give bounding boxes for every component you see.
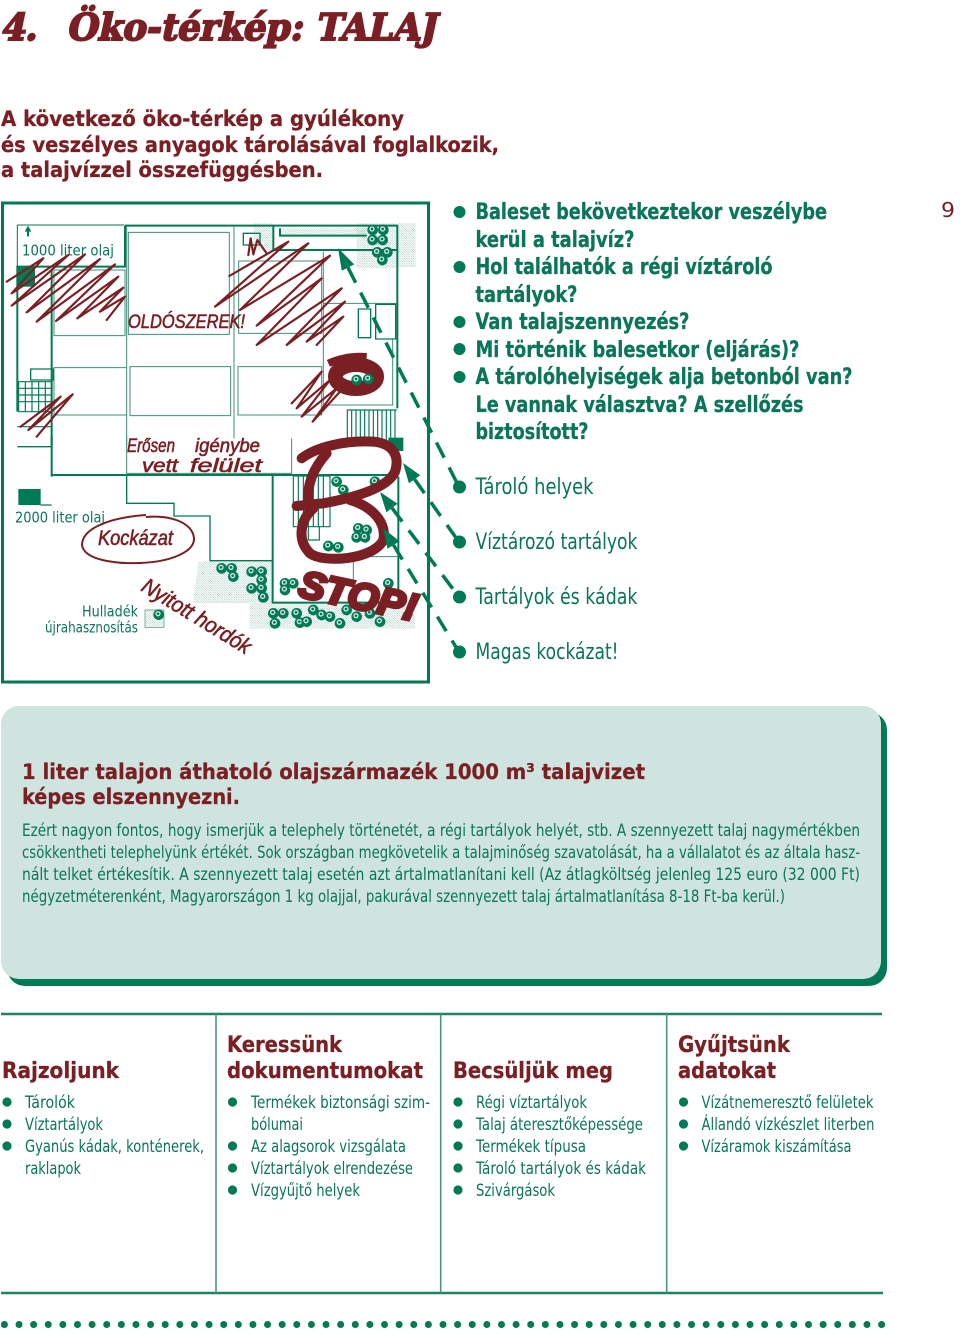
map legend <box>453 475 638 665</box>
handwritten notes: vett <box>142 456 179 477</box>
intro text: és veszélyes anyagok tárolásával foglalkozik, <box>1 133 499 158</box>
panel body <box>1 706 881 979</box>
heading: Keressünk <box>227 1033 343 1058</box>
heading: adatokat <box>678 1059 776 1084</box>
intro text: A következő öko-térkép a gyúlékony <box>1 107 404 132</box>
red figure 8 warning mark <box>297 441 397 559</box>
map legend: Magas kockázat! <box>476 640 618 665</box>
list: bólumai <box>251 1115 303 1135</box>
list <box>228 1093 430 1201</box>
question list: kerül a talajvíz? <box>476 228 634 253</box>
callout heading: 1 liter talajon áthatoló olajszármazék 1000 m³ talajvizet <box>22 760 645 785</box>
red hatching marks <box>7 238 377 437</box>
map labels <box>15 242 138 636</box>
question list: biztosított? <box>476 420 588 445</box>
page number: 9 <box>941 198 955 222</box>
list: Termékek típusa <box>475 1137 586 1157</box>
list: Vízáramok kiszámítása <box>702 1137 852 1157</box>
callout heading <box>22 760 645 810</box>
map frame <box>2 203 428 682</box>
list: Állandó vízkészlet literben <box>702 1113 874 1135</box>
question list: Hol találhatók a régi víztároló <box>476 255 772 280</box>
question list: tartályok? <box>476 283 578 308</box>
list: Gyanús kádak, konténerek, <box>25 1137 204 1157</box>
intro text: a talajvízzel összefüggésben. <box>1 158 323 183</box>
heading: dokumentumokat <box>227 1059 423 1084</box>
handwritten notes: Erősen <box>127 436 175 457</box>
arrow: high risk <box>383 528 459 652</box>
heading <box>678 1033 791 1084</box>
handwritten notes: OLDÓSZEREK! <box>128 311 246 333</box>
heading: Rajzoljunk <box>2 1059 120 1084</box>
map labels: újrahasznosítás <box>45 618 138 636</box>
map labels: 1000 liter olaj <box>22 242 114 260</box>
arrow: tanks and vats <box>380 492 459 597</box>
panel: site map <box>2 203 459 682</box>
map legend: Tároló helyek <box>475 475 594 500</box>
list: raklapok <box>25 1159 81 1179</box>
arrow: water tanks <box>403 463 459 542</box>
handwritten notes: felület <box>190 456 263 477</box>
question list <box>454 200 852 445</box>
callout heading: képes elszennyezni. <box>22 785 240 810</box>
list: Tároló tartályok és kádak <box>475 1159 646 1179</box>
list: Az alagsorok vizsgálata <box>251 1137 406 1157</box>
list <box>2 1093 204 1179</box>
heading: Gyűjtsünk <box>678 1033 791 1058</box>
list <box>679 1093 874 1157</box>
list: Vízátnemeresztő felületek <box>702 1093 874 1113</box>
callout body text <box>22 821 860 907</box>
handwritten notes: Kockázat <box>98 527 174 550</box>
list: Tárolók <box>24 1093 75 1113</box>
map legend: Víztározó tartályok <box>476 530 638 555</box>
list: Víztartályok <box>25 1115 103 1135</box>
question list: Le vannak választva? A szellőzés <box>476 393 804 418</box>
list: Termékek biztonsági szim- <box>250 1093 430 1113</box>
list: Szivárgások <box>476 1181 555 1201</box>
list: Régi víztartályok <box>476 1093 587 1113</box>
panel: soil contamination callout <box>1 706 887 986</box>
panel: column Gyűjtsünk adatokat <box>678 1033 874 1157</box>
handwritten notes: igénybe <box>195 436 260 457</box>
list <box>453 1093 646 1201</box>
question list: Baleset bekövetkeztekor veszélybe <box>476 200 827 225</box>
heading: Becsüljük meg <box>453 1059 613 1084</box>
handwritten notes <box>98 311 263 660</box>
panel: column Rajzoljunk <box>2 1059 204 1179</box>
risk ellipse <box>82 515 194 563</box>
list: Talaj áteresztőképessége <box>475 1115 643 1135</box>
intro text <box>1 107 499 183</box>
floor plan upper part <box>17 223 416 451</box>
handwritten notes: Nyitott hordók <box>137 573 257 660</box>
question list: Van talajszennyezés? <box>476 310 690 335</box>
floor plan lower part <box>17 437 415 629</box>
arrow: storage places <box>338 248 459 487</box>
question list: A tárolóhelyiségek alja betonból van? <box>476 365 852 390</box>
map labels: 2000 liter olaj <box>15 508 105 526</box>
question list: Mi történik balesetkor (eljárás)? <box>476 338 800 363</box>
list: Víztartályok elrendezése <box>251 1159 413 1179</box>
map legend: Tartályok és kádak <box>475 585 638 610</box>
panel shadow <box>7 712 887 986</box>
map labels: Hulladék <box>82 602 138 620</box>
list: Vízgyűjtő helyek <box>251 1181 360 1201</box>
STOP note: STOP! <box>295 564 421 630</box>
title: Öko-térkép: TALAJ <box>64 4 444 49</box>
heading <box>227 1033 423 1084</box>
panel: column Becsüljük meg <box>453 1059 646 1201</box>
panel: column Keressünk dokumentumokat <box>227 1033 430 1201</box>
